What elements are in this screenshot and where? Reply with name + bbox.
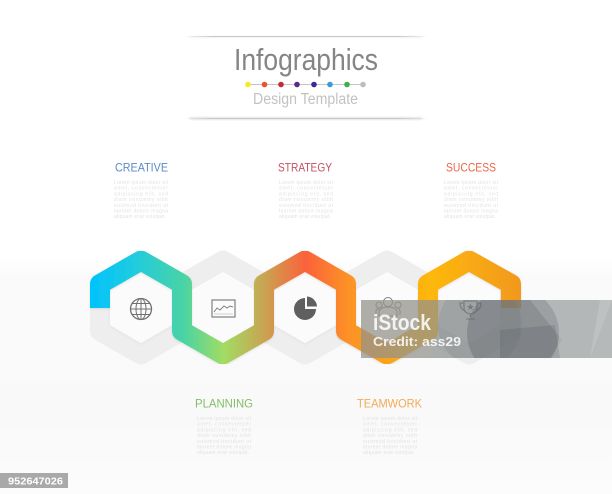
text block: creative: diam nonummy nibh: [114, 197, 168, 203]
text block: strategy: laoreet dolore magna: [279, 208, 333, 214]
text block: planning: laoreet dolore magna: [197, 444, 251, 450]
text block: creative: euismod tincidunt ut: [114, 203, 169, 209]
text block: success: adipiscing elit, sed: [444, 191, 498, 197]
hexagon chain: [100, 260, 511, 354]
text block: strategy: STRATEGY: [278, 162, 332, 174]
text block: planning: PLANNING: [195, 398, 253, 410]
icon: globe: [130, 298, 152, 320]
grey hexagon outlines: [100, 260, 510, 354]
text block: teamwork: adipiscing elit, sed: [363, 427, 417, 433]
icon: line chart: [212, 300, 235, 317]
text block: success: diam nonummy nibh: [444, 197, 498, 203]
icon: pie chart: [294, 296, 317, 320]
text block: teamwork: laoreet dolore magna: [363, 444, 417, 450]
text block: teamwork: amet, consectetuer: [363, 422, 417, 428]
text block: creative: laoreet dolore magna: [114, 208, 168, 214]
text block: teamwork: aliquam erat volutpat.: [363, 450, 415, 456]
image id tag: [0, 473, 68, 488]
text block: success: euismod tincidunt ut: [444, 203, 499, 209]
icon: trophy: [460, 301, 481, 319]
text block: planning: aliquam erat volutpat.: [197, 450, 249, 456]
text block: creative: CREATIVE: [115, 162, 168, 174]
text block: creative: amet, consectetuer: [114, 186, 168, 192]
text block: success: amet, consectetuer: [444, 186, 498, 192]
text block: strategy: [278, 162, 334, 220]
text block: success: [444, 162, 499, 220]
subtitle: Design Template: Design Template: [253, 91, 358, 108]
text block: success: aliquam erat volutpat.: [444, 214, 496, 220]
text block: teamwork: euismod tincidunt ut: [363, 439, 418, 445]
heading: Infographics: Infographics: [234, 42, 378, 77]
icon: team: [376, 298, 401, 316]
text block: teamwork: TEAMWORK: [357, 398, 422, 410]
text block: success: Lorem ipsum dolor sit: [444, 180, 499, 186]
colored dot line: [245, 82, 366, 87]
text block: teamwork: [357, 398, 422, 456]
watermark logo text: iStock: [373, 310, 432, 335]
text block: planning: Lorem ipsum dolor sit: [197, 416, 252, 422]
text block: planning: amet, consectetuer: [197, 422, 251, 428]
text block: creative: adipiscing elit, sed: [114, 191, 168, 197]
text block: creative: Lorem ipsum dolor sit: [114, 180, 169, 186]
gradient ribbon: [100, 260, 511, 354]
text block: strategy: adipiscing elit, sed: [279, 191, 333, 197]
text block: success: laoreet dolore magna: [444, 208, 498, 214]
watermark band: [361, 300, 612, 358]
text block: strategy: Lorem ipsum dolor sit: [279, 180, 334, 186]
watermark credit text: Credit: ass29: [373, 335, 461, 349]
text block: teamwork: Lorem ipsum dolor sit: [363, 416, 418, 422]
text block: creative: aliquam erat volutpat.: [114, 214, 166, 220]
text block: strategy: diam nonummy nibh: [279, 197, 333, 203]
text block: strategy: amet, consectetuer: [279, 186, 333, 192]
text block: planning: diam nonummy nibh: [197, 433, 251, 439]
text block: strategy: euismod tincidunt ut: [279, 203, 334, 209]
text block: strategy: aliquam erat volutpat.: [279, 214, 331, 220]
image id tag: 952647026: [8, 476, 63, 488]
title block: [184, 36, 428, 120]
text block: planning: [195, 398, 253, 456]
text block: planning: adipiscing elit, sed: [197, 427, 251, 433]
text block: creative: [114, 162, 169, 220]
text block: planning: euismod tincidunt ut: [197, 439, 252, 445]
text block: teamwork: diam nonummy nibh: [363, 433, 417, 439]
text block: success: SUCCESS: [446, 162, 496, 174]
white hexagon centers: [112, 274, 498, 342]
